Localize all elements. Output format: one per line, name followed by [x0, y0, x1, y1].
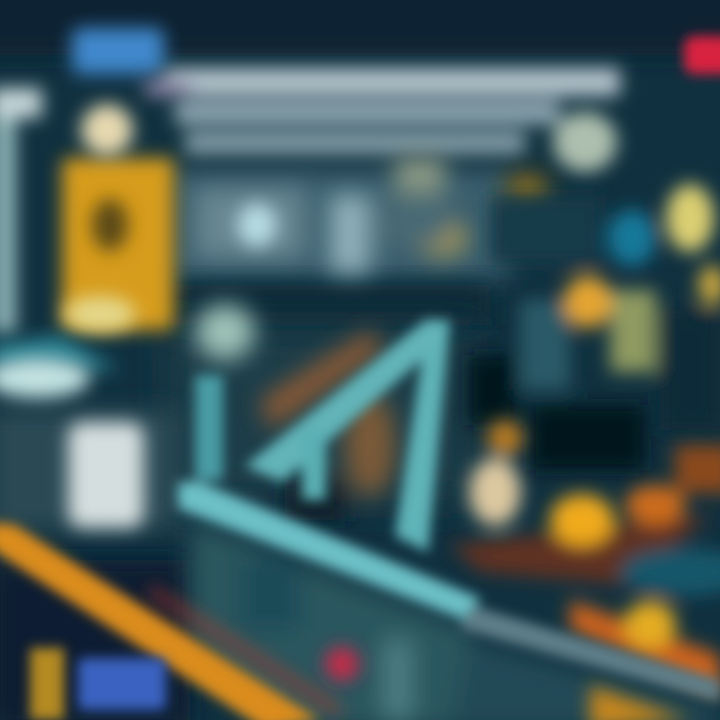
panel: yellow sign	[62, 104, 174, 332]
city lights right	[468, 184, 720, 470]
teal roof	[0, 335, 120, 398]
badge: red top right	[684, 36, 720, 74]
heading: blurred title lines	[145, 68, 620, 172]
brown accents in bridge span	[195, 304, 396, 520]
left column	[0, 88, 42, 333]
bottom left legend marks	[30, 647, 359, 720]
boats and warm lights	[450, 420, 720, 720]
deck lower structure	[190, 520, 720, 720]
red glow along beam	[150, 590, 340, 712]
building panels behind title	[195, 158, 549, 273]
window glow	[237, 203, 277, 247]
badge: blue top left	[72, 28, 164, 74]
white cylinder	[68, 422, 144, 528]
bridge: teal tower and deck	[178, 318, 720, 702]
orange diagonal beam	[0, 522, 320, 720]
